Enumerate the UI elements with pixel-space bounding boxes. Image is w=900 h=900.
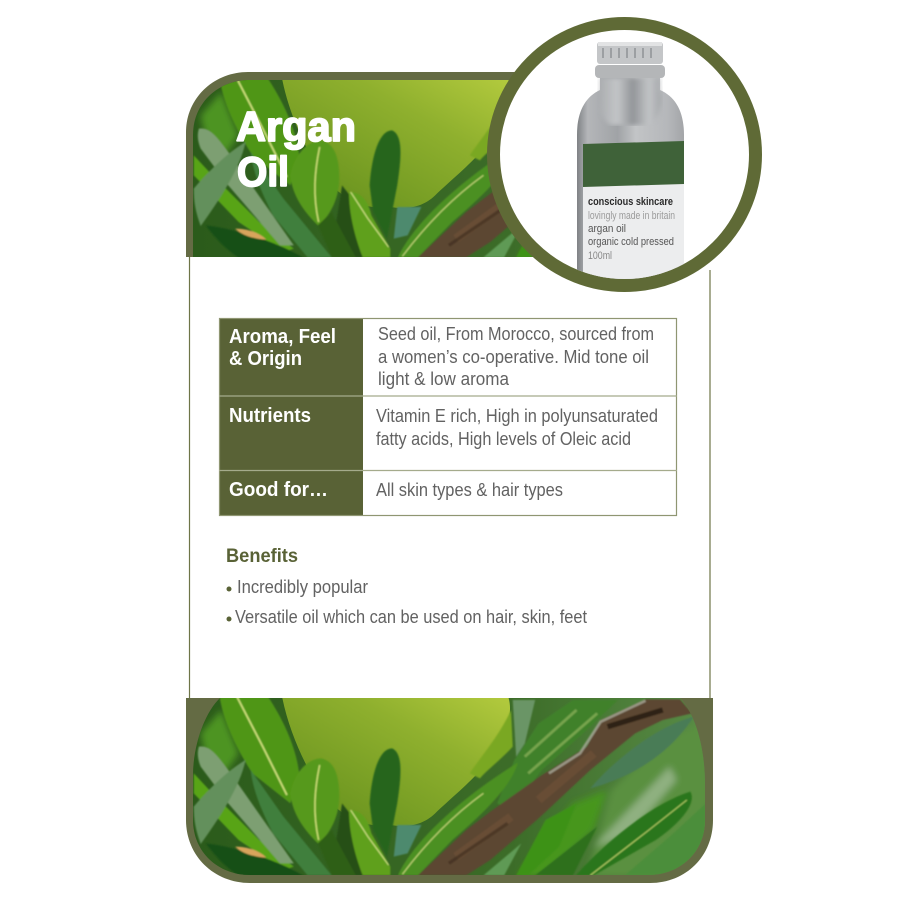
benefits list [226, 577, 587, 627]
row: nutrients: Vitamin E rich, High in polyunsaturated [376, 406, 658, 426]
row: good for: Good for… [229, 479, 328, 501]
panel: content frame lines [190, 257, 710, 698]
row: aroma, feel and origin [229, 324, 654, 389]
row: aroma, feel and origin: light & low aroma [378, 369, 510, 389]
product circle with bottle [494, 24, 756, 290]
bottle label text: organic cold pressed [588, 236, 674, 248]
row: good for [229, 479, 563, 501]
bottle label text [588, 196, 675, 262]
panel: properties table [219, 318, 677, 516]
title [236, 103, 356, 195]
title: Oil [237, 148, 289, 195]
panel: top photo header [186, 72, 533, 257]
bottle label text: argan oil [588, 223, 626, 235]
bottle label text: lovingly made in britain [588, 210, 675, 222]
bottle label text: 100ml [588, 250, 612, 262]
row: nutrients: Nutrients [229, 405, 311, 427]
icon: bottle [577, 42, 684, 290]
benefits heading: Benefits [226, 546, 298, 567]
panel: bottom photo footer [186, 698, 713, 883]
row: good for: All skin types & hair types [376, 480, 563, 500]
benefits list: Versatile oil which can be used on hair, skin, feet [235, 607, 587, 627]
row: nutrients [229, 405, 658, 449]
row: aroma, feel and origin: & Origin [229, 348, 302, 370]
row: aroma, feel and origin: Aroma, Feel [229, 326, 336, 348]
title: Argan [236, 103, 356, 150]
argan oil infographic [186, 17, 762, 883]
bottle label text: conscious skincare [588, 196, 673, 208]
row: aroma, feel and origin: Seed oil, From Morocco, sourced from [378, 324, 654, 344]
row: nutrients: fatty acids, High levels of Oleic acid [376, 429, 631, 449]
benefits list: Incredibly popular [237, 577, 368, 597]
row: aroma, feel and origin: a women’s co-operative. Mid tone oil [378, 347, 649, 367]
